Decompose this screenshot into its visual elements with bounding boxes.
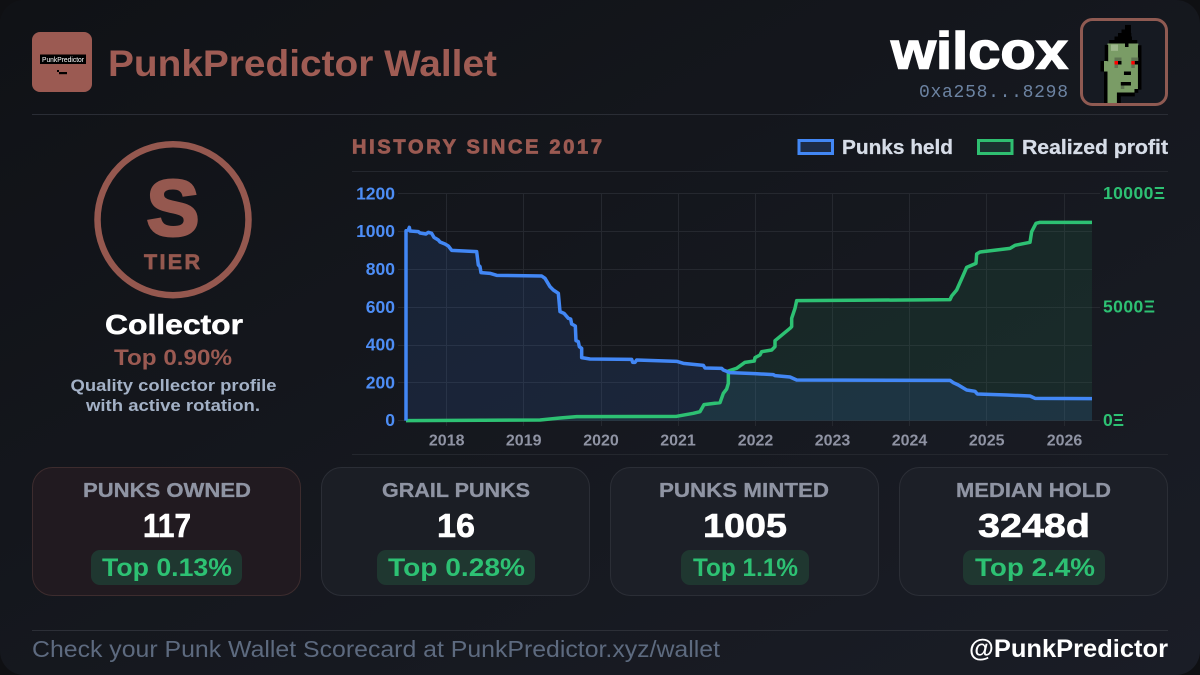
tier description: Quality collector profile [70,376,276,395]
card: grail punks [322,468,590,596]
footer handle: @PunkPredictor [969,635,1168,663]
title: PunkPredictor Wallet [108,42,498,84]
card: punks owned: 117 [143,508,191,545]
card: median hold [900,468,1168,596]
card: median hold: Top 2.4% [975,554,1095,582]
left axis labels: 400 [366,334,395,354]
right axis labels: 10000Ξ [1103,183,1165,203]
right axis labels: 0Ξ [1103,410,1124,430]
tier name: Collector [105,309,243,340]
left axis labels: 200 [366,372,395,392]
profit line [406,222,1092,421]
x axis labels [429,432,1082,450]
card: median hold: 3248d [978,508,1090,545]
avatar: zombie punk [1082,20,1166,104]
left axis labels: 600 [366,297,395,317]
x axis labels: 2024 [892,432,927,450]
tier badge: TIER [144,250,200,274]
card: punks minted [610,468,878,596]
chart: history [356,183,1165,450]
logo: PunkPredictor [42,55,84,64]
tier description [70,376,276,415]
tier badge: S [147,163,199,252]
x axis labels: 2018 [429,432,465,450]
card: punks owned [32,468,300,596]
left axis labels: 0 [385,410,395,430]
punks held area [406,227,1092,421]
punks held line [406,227,1092,421]
footer call to action: Check your Punk Wallet Scorecard at PunkPredictor.xyz/wallet [32,636,720,662]
panel: tier [70,144,276,415]
x axis labels: 2020 [583,432,619,450]
card: grail punks: GRAIL PUNKS [382,479,530,502]
legend: Realized profit [1022,137,1168,159]
tier badge [98,144,248,295]
logo [32,32,92,92]
tier rank: Top 0.90% [114,345,232,370]
wallet address: 0xa258...8298 [919,83,1068,103]
x axis labels: 2021 [660,432,696,450]
card: punks minted: PUNKS MINTED [659,479,829,502]
card: punks minted: 1005 [703,508,787,545]
x axis labels: 2019 [506,432,542,450]
right axis labels: 5000Ξ [1103,296,1155,316]
x axis labels: 2025 [969,432,1005,450]
left axis labels [356,183,395,430]
right axis labels [1103,183,1165,430]
left axis labels: 800 [366,259,395,279]
x axis labels: 2026 [1047,432,1082,450]
legend [799,137,1168,159]
card: punks owned: Top 0.13% [102,554,232,582]
card: median hold: MEDIAN HOLD [956,479,1111,502]
card: grail punks: Top 0.28% [388,554,525,582]
left axis labels: 1200 [356,183,395,203]
left axis labels: 1000 [356,221,395,241]
chart heading: HISTORY SINCE 2017 [352,136,602,158]
wallet name: wilcox [890,22,1068,80]
x axis labels: 2023 [815,432,850,450]
card: punks minted: Top 1.1% [693,554,798,582]
legend: Punks held [842,137,953,159]
profit area [406,222,1092,421]
x axis labels: 2022 [738,432,773,450]
card: grail punks: 16 [437,508,475,545]
card: punks owned: PUNKS OWNED [83,479,251,502]
tier description: with active rotation. [85,396,260,415]
